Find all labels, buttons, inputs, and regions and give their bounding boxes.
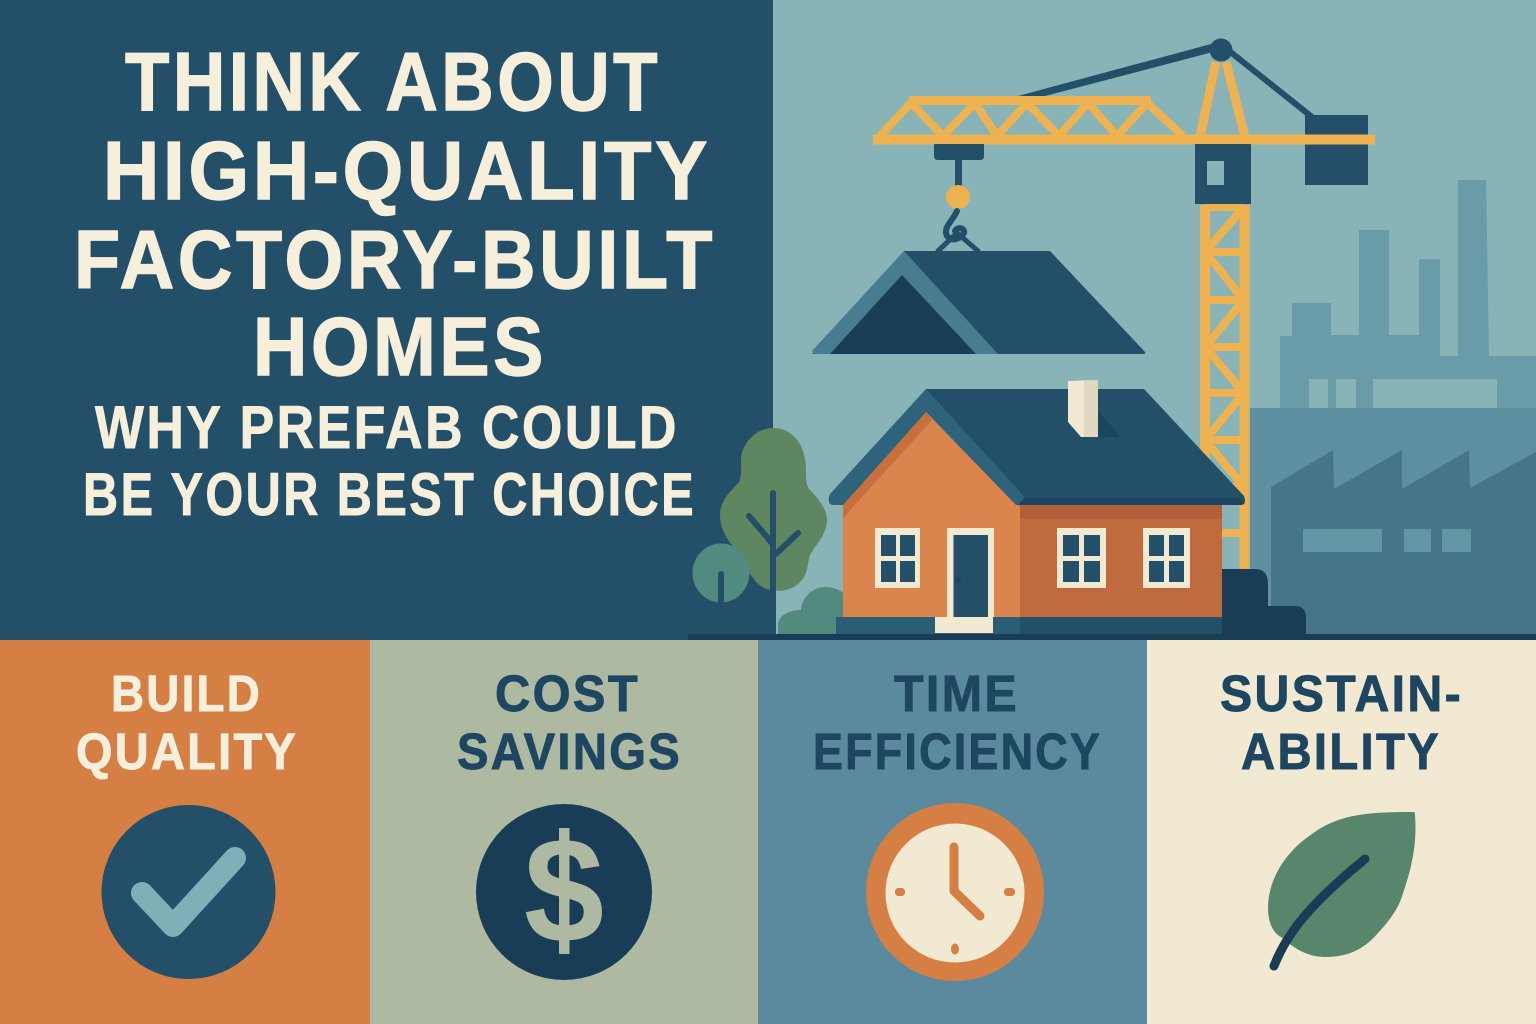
cab window — [1207, 161, 1224, 185]
panel: illustration background — [773, 0, 1536, 640]
door — [947, 528, 994, 617]
factory skyline background — [1250, 180, 1536, 640]
foundation — [836, 617, 1228, 635]
icon: clock — [866, 803, 1044, 981]
heading: build quality: QUALITY — [76, 723, 298, 780]
panel: cost savings — [370, 640, 758, 1024]
counterweight — [1305, 115, 1368, 185]
icon: leaf — [1268, 812, 1416, 966]
trolley — [934, 144, 984, 160]
heading: time efficiency — [813, 665, 1102, 780]
tree: small — [692, 544, 750, 634]
title: THINK ABOUT — [125, 35, 661, 128]
panel: time efficiency — [758, 640, 1147, 1024]
subtitle — [83, 394, 696, 528]
back factory silhouette — [1250, 180, 1536, 640]
icon: dollar badge: $ — [524, 806, 604, 974]
heading: sustainability: SUSTAIN- — [1220, 665, 1463, 722]
title — [74, 35, 716, 393]
tower crane — [873, 38, 1375, 572]
hook ball — [946, 185, 970, 209]
back factory windows — [1309, 379, 1497, 408]
crane cab — [1195, 144, 1251, 204]
bush — [778, 587, 843, 634]
title: HIGH-QUALITY — [103, 124, 711, 217]
ground line — [688, 634, 1536, 640]
prefab roof section lifted by crane — [812, 251, 1145, 354]
house gable wall — [843, 412, 1020, 617]
panel: build quality — [0, 640, 370, 1024]
middle factory layer — [1250, 408, 1536, 640]
subtitle: WHY PREFAB COULD — [95, 394, 679, 461]
lifted roof underside — [830, 275, 976, 354]
main roof — [926, 389, 1245, 505]
gable shadow — [843, 412, 932, 518]
house right wall — [1020, 505, 1222, 617]
heading: build quality — [76, 665, 298, 780]
crane pivot — [1210, 38, 1232, 62]
window right — [1143, 528, 1190, 588]
crane jib truss — [873, 62, 1375, 140]
title: FACTORY-BUILT — [74, 213, 716, 306]
heading: build quality: BUILD — [111, 665, 262, 722]
heading: cost savings — [457, 665, 682, 780]
front factory sawtooth building — [1271, 450, 1536, 640]
heading: cost savings: COST — [495, 665, 640, 722]
eave shadow on wall — [1020, 505, 1222, 519]
hook cable — [955, 160, 962, 186]
crane rear support cable — [1228, 50, 1312, 117]
panel: sustainability — [1147, 640, 1536, 1024]
lifted roof main slope — [812, 251, 1145, 354]
front step — [935, 617, 993, 633]
front factory windows — [1303, 529, 1471, 552]
title: HOMES — [253, 300, 547, 393]
icon: dollar badge — [476, 804, 652, 980]
lifted roof gable trim — [812, 251, 998, 354]
dark stepped hedge — [1222, 569, 1306, 636]
gable roof trim — [829, 389, 1024, 505]
heading: cost savings: SAVINGS — [457, 723, 682, 780]
subtitle: BE YOUR BEST CHOICE — [83, 461, 696, 528]
heading: time efficiency: EFFICIENCY — [813, 723, 1102, 780]
heading: sustainability: ABILITY — [1241, 723, 1441, 780]
window middle — [1057, 528, 1106, 588]
tree: large — [720, 428, 827, 634]
crane hook and slings — [938, 211, 978, 251]
eave stripe — [1018, 498, 1243, 505]
window left — [875, 528, 920, 588]
crane mast lattice — [1205, 205, 1244, 572]
panel: title background — [0, 0, 773, 640]
house — [829, 380, 1245, 635]
chimney — [1068, 380, 1120, 437]
heading: time efficiency: TIME — [894, 665, 1019, 722]
crane front support cable — [1018, 44, 1213, 96]
icon: check mark badge — [102, 805, 276, 979]
heading: sustainability — [1220, 665, 1463, 780]
